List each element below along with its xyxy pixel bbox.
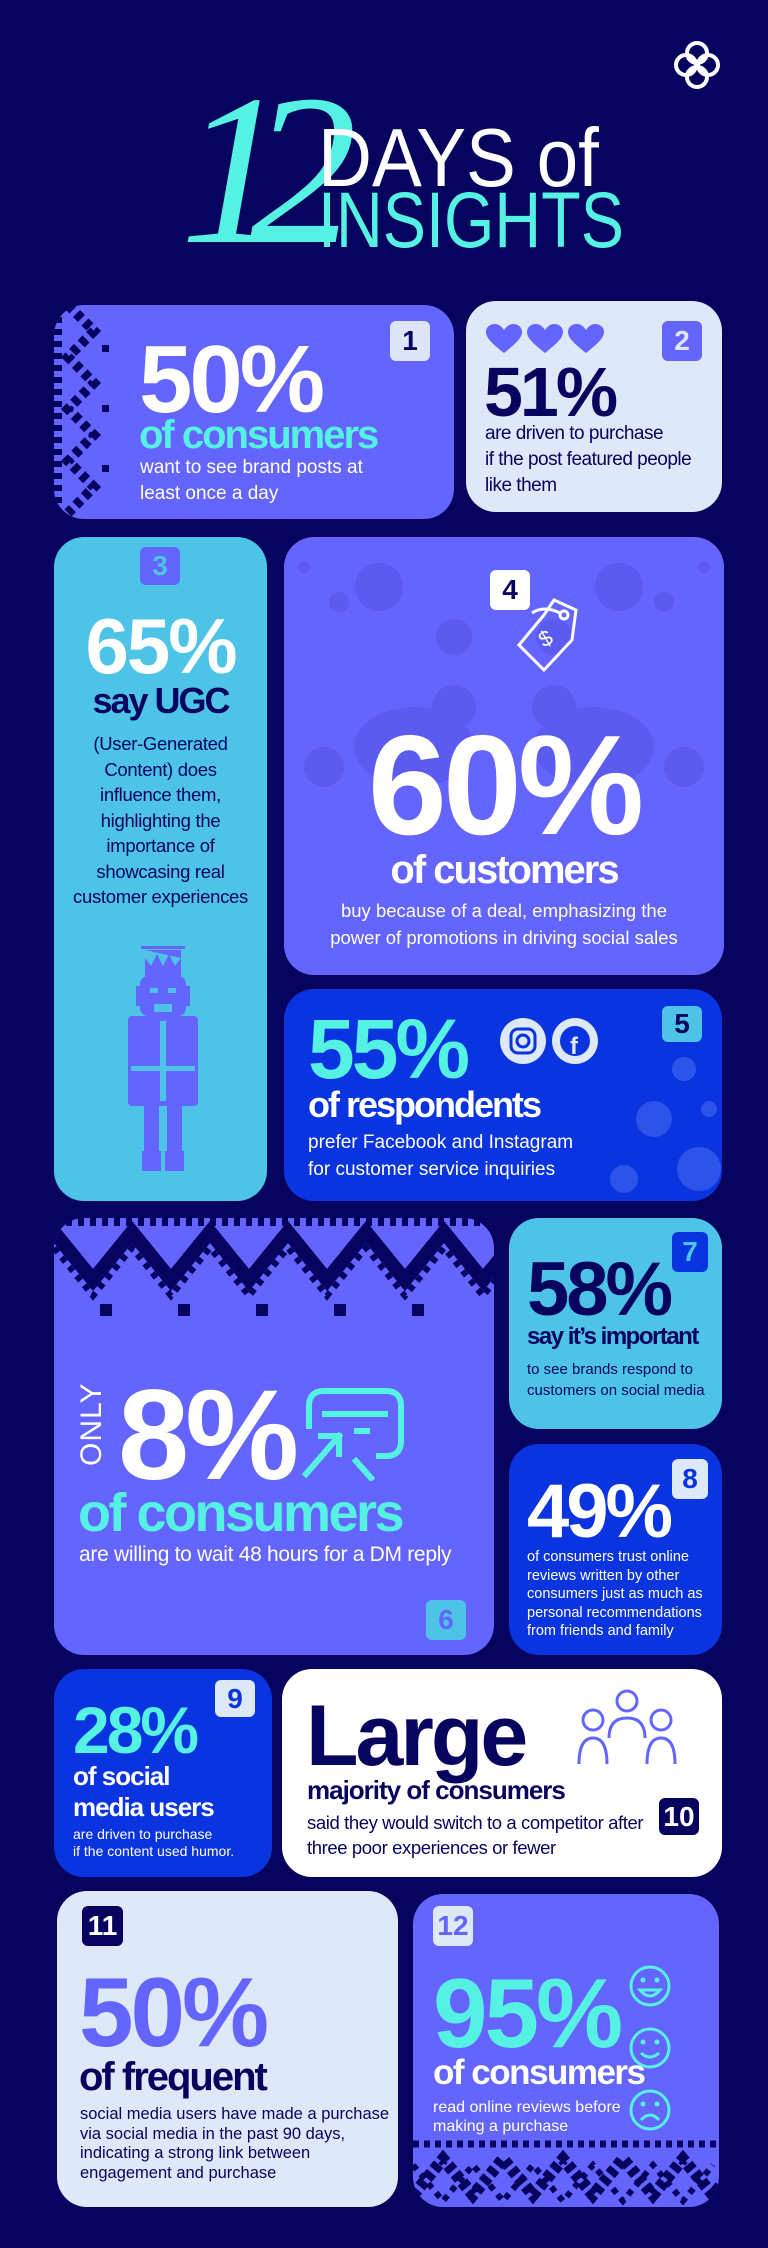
icon: chat <box>302 1388 404 1481</box>
body: three poor experiences or fewer <box>307 1837 556 1858</box>
body: read online reviews before <box>433 2099 621 2116</box>
subhead: of social <box>73 1761 169 1791</box>
body <box>485 423 691 496</box>
subhead: media users <box>73 1792 214 1822</box>
badge 7 <box>672 1232 708 1272</box>
knit pattern top <box>54 1218 494 1316</box>
body: if the content used humor. <box>73 1843 234 1859</box>
body: personal recommendations <box>527 1604 702 1620</box>
badge 8: 8 <box>682 1463 698 1494</box>
body: showcasing real <box>96 860 225 882</box>
decorative snowflakes <box>610 1057 721 1193</box>
badge 5 <box>662 1006 702 1042</box>
body: prefer Facebook and Instagram <box>308 1132 573 1153</box>
body: to see brands respond to <box>527 1361 693 1378</box>
body: importance of <box>106 835 215 856</box>
knit pattern left <box>54 306 109 516</box>
badge 10: 10 <box>663 1801 695 1832</box>
body <box>140 457 363 504</box>
icons: faces <box>630 1966 670 2130</box>
badge 9: 9 <box>227 1683 243 1714</box>
badge 12: 12 <box>437 1910 469 1941</box>
stat 50%: 50% <box>139 326 322 433</box>
body: influence them, <box>100 784 221 805</box>
body: consumers just as much as <box>527 1586 703 1602</box>
body: power of promotions in driving social sales <box>330 927 678 948</box>
badge 11: 11 <box>88 1910 117 1941</box>
panel 9 <box>54 1669 272 1877</box>
subhead: of consumers <box>433 2053 644 2092</box>
panel 10 <box>282 1669 722 1877</box>
panel 1 <box>54 305 454 519</box>
body: of consumers trust online <box>527 1549 689 1565</box>
subhead: majority of consumers <box>307 1775 565 1805</box>
subhead: of consumers <box>78 1483 402 1543</box>
body <box>527 1361 705 1399</box>
badge 1: 1 <box>402 325 418 356</box>
body: for customer service inquiries <box>308 1159 555 1180</box>
body: reviews written by other <box>527 1568 679 1584</box>
logo <box>674 41 720 89</box>
knit pattern bottom <box>413 2140 719 2206</box>
badge 8 <box>672 1459 708 1499</box>
subhead: say it’s important <box>527 1323 698 1350</box>
body <box>73 733 248 907</box>
badge 6: 6 <box>438 1604 454 1635</box>
body: said they would switch to a competitor after <box>307 1812 643 1833</box>
badge 12 <box>433 1906 473 1946</box>
body <box>330 900 678 948</box>
body: via social media in the past 90 days, <box>80 2124 345 2142</box>
subhead: of consumers <box>139 413 377 457</box>
badge 1 <box>390 321 430 361</box>
icons: instagram, facebook: f <box>570 1033 579 1060</box>
badge 5: 5 <box>674 1008 690 1039</box>
stat 55%: 55% <box>308 1002 467 1096</box>
subhead <box>73 1761 214 1822</box>
title: DAYS of: DAYS of <box>318 111 599 204</box>
body: buy because of a deal, emphasizing the <box>341 900 667 921</box>
subhead: of respondents <box>308 1084 540 1125</box>
stat 28%: 28% <box>73 1693 196 1767</box>
title: 12: 12 <box>180 50 319 289</box>
body: Content) does <box>104 758 217 780</box>
icons: instagram, facebook <box>500 1018 598 1064</box>
badge 11 <box>82 1906 123 1946</box>
stat 65%: 65% <box>85 602 236 690</box>
panel 11 <box>57 1891 398 2207</box>
body: engagement and purchase <box>80 2164 276 2182</box>
subhead: of frequent <box>79 2055 266 2099</box>
body: customer experiences <box>73 886 248 907</box>
badge 7: 7 <box>682 1236 698 1267</box>
title <box>180 50 624 289</box>
badge 3: 3 <box>152 550 168 581</box>
panel 6 <box>54 1218 494 1655</box>
badge 4 with tag icon: 4 <box>502 574 518 605</box>
body: from friends and family <box>527 1623 674 1639</box>
subhead: of customers <box>390 848 618 892</box>
panel 7 <box>509 1218 722 1429</box>
stat 60%: 60% <box>368 706 640 865</box>
stat 58%: 58% <box>527 1247 670 1332</box>
ONLY vertical: ONLY <box>75 1383 108 1466</box>
body <box>80 2105 389 2182</box>
body: indicating a strong link between <box>80 2144 310 2162</box>
stat 8%: 8% <box>118 1364 295 1507</box>
panel 12 <box>413 1894 719 2207</box>
panel 2 <box>466 301 722 512</box>
body <box>73 1826 234 1859</box>
badge 2 <box>662 321 702 361</box>
stat 95%: 95% <box>433 1958 620 2068</box>
body: highlighting the <box>101 810 220 830</box>
badge 4 with tag icon: $ <box>534 625 557 652</box>
badge 9 <box>215 1680 255 1717</box>
badge 3 <box>140 547 180 585</box>
icon: hearts <box>486 324 604 353</box>
icon: people <box>578 1690 676 1764</box>
stat 49%: 49% <box>527 1469 670 1554</box>
stat 50%: 50% <box>79 1957 266 2067</box>
badge 4 with tag icon <box>490 570 578 672</box>
panel 5 <box>284 989 722 1201</box>
body: if the post featured people <box>485 449 691 470</box>
body <box>308 1132 573 1180</box>
badge 6 <box>426 1600 466 1640</box>
icon: nutcracker <box>128 946 198 1171</box>
body <box>433 2099 621 2135</box>
headline Large: Large <box>306 1688 525 1784</box>
body: (User-Generated <box>93 733 228 754</box>
body <box>527 1549 703 1639</box>
badge 2: 2 <box>674 325 690 356</box>
body: are willing to wait 48 hours for a DM reply <box>79 1543 451 1566</box>
body: least once a day <box>140 483 278 504</box>
body: want to see brand posts at <box>140 457 363 478</box>
panel 4 <box>284 537 724 975</box>
stat 51%: 51% <box>484 353 615 431</box>
body: are driven to purchase <box>73 1826 212 1842</box>
body <box>307 1812 644 1858</box>
body: customers on social media <box>527 1382 705 1399</box>
body: social media users have made a purchase <box>80 2105 389 2123</box>
panel 8 <box>509 1444 722 1655</box>
body: making a purchase <box>433 2118 568 2135</box>
panel 3 <box>54 537 267 1201</box>
subhead: say UGC <box>92 680 229 721</box>
body: like them <box>485 475 557 496</box>
decorative folk pattern <box>298 561 710 787</box>
body: are driven to purchase <box>485 423 663 444</box>
title: INSIGHTS: INSIGHTS <box>318 175 624 264</box>
badge 10 <box>659 1798 699 1835</box>
